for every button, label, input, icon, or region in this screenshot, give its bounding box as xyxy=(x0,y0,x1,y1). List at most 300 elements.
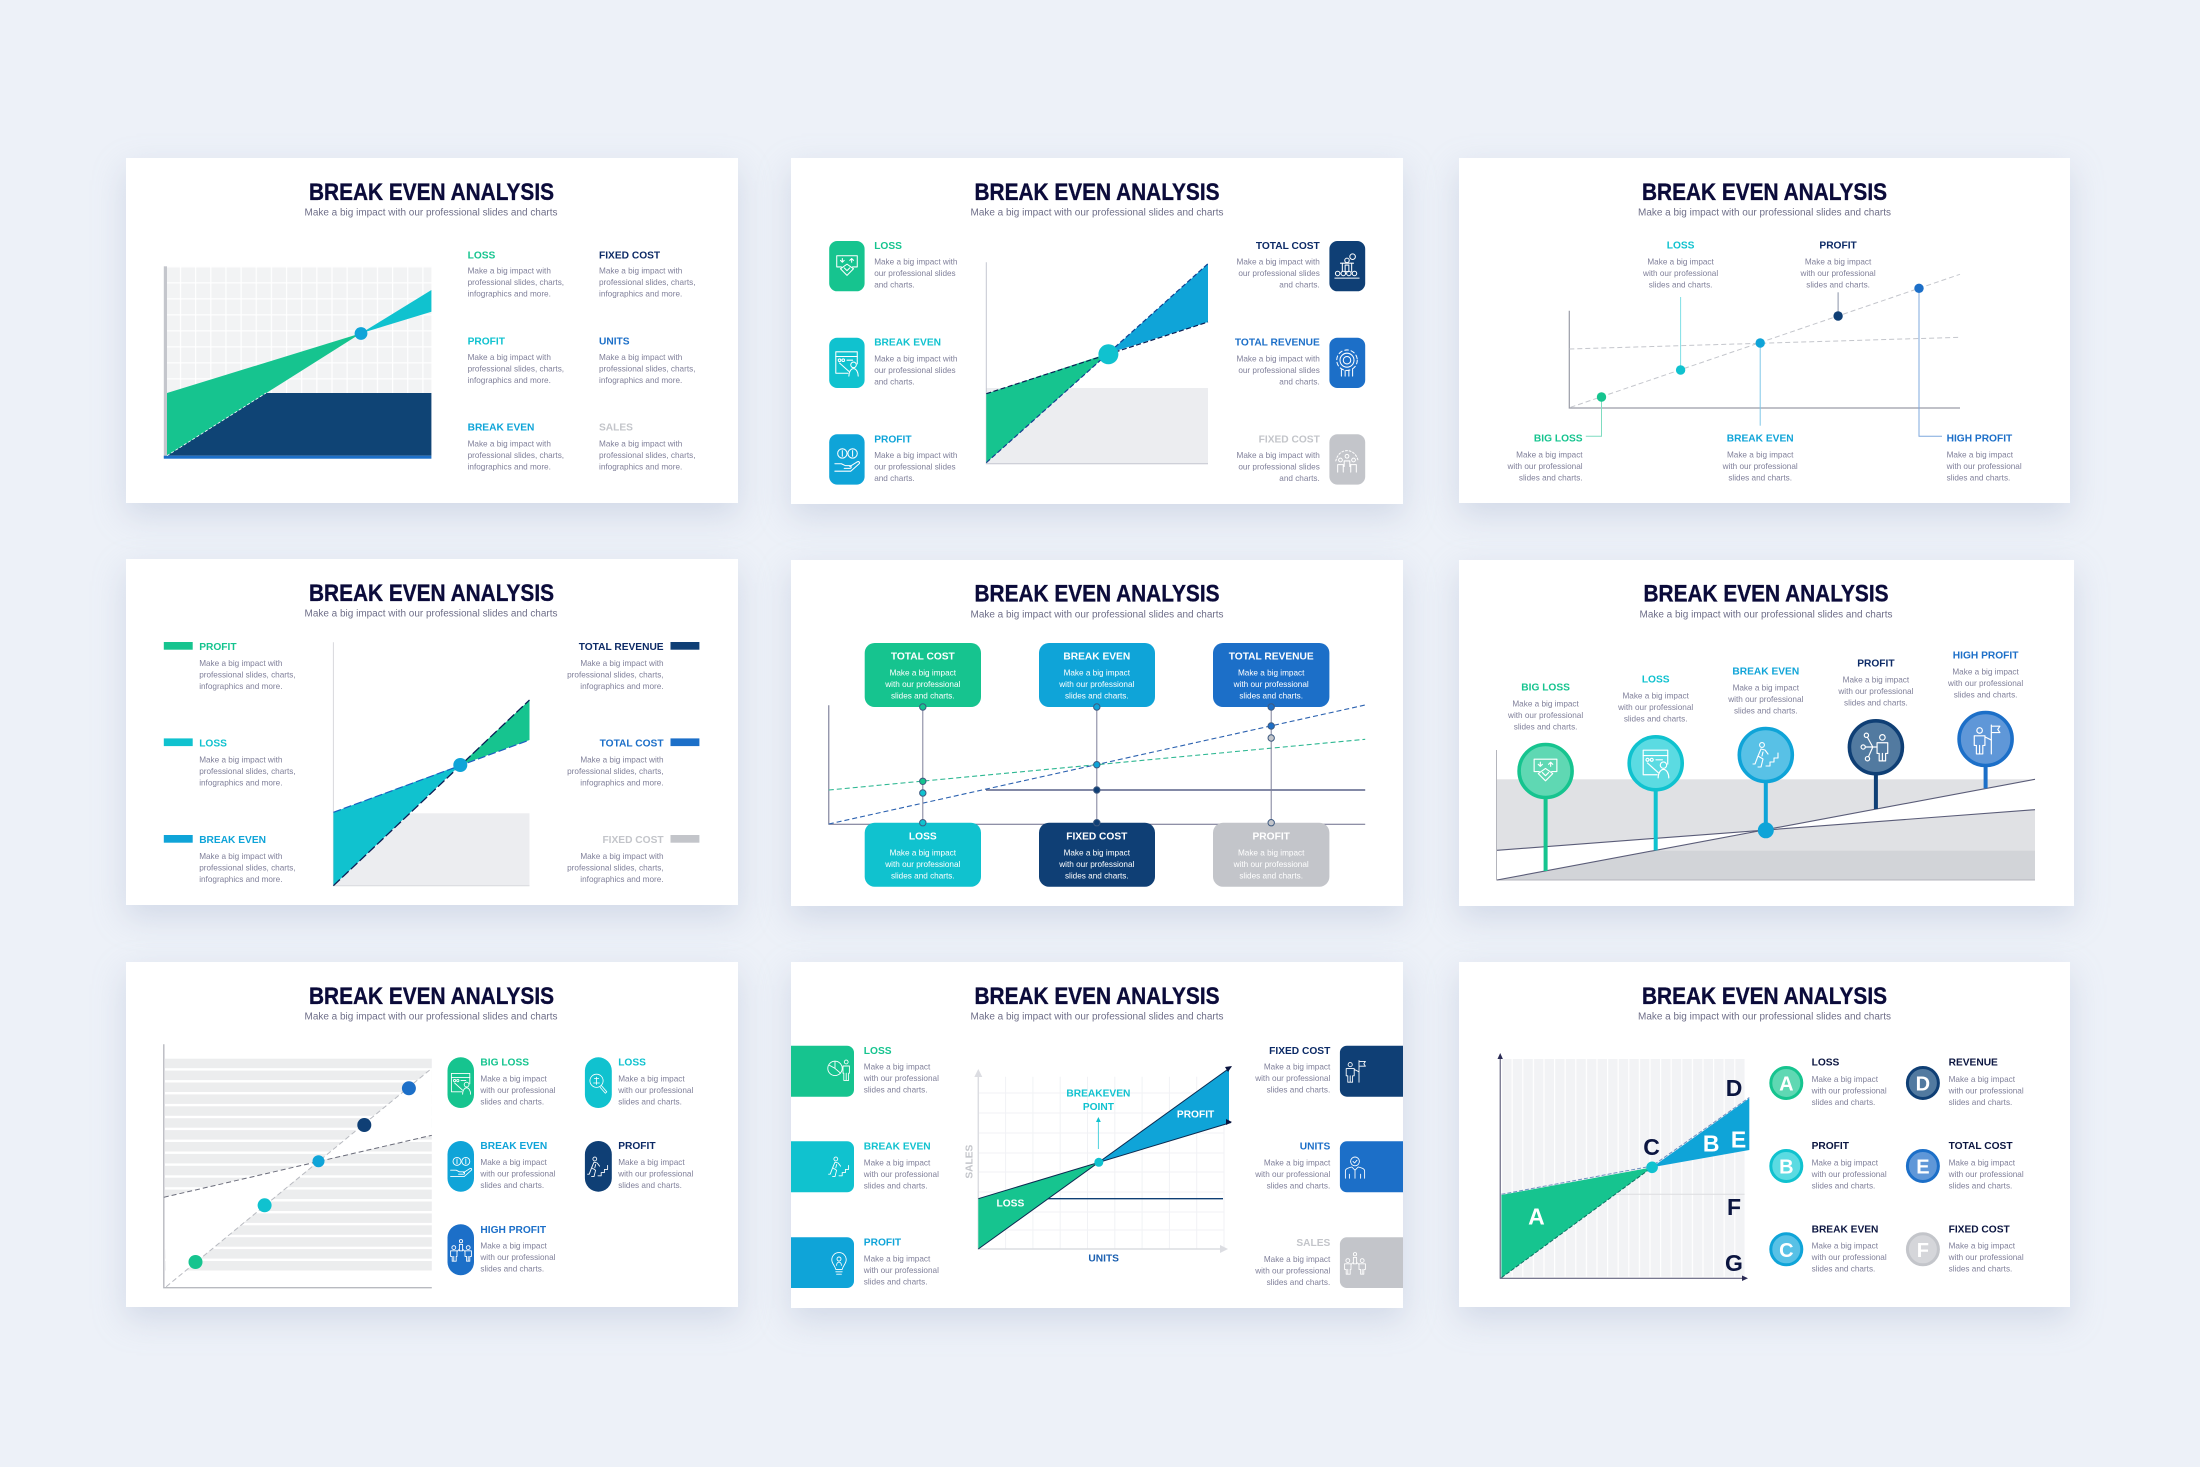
box: loss: slides and charts. xyxy=(891,872,955,881)
item: break even: with our professional xyxy=(479,1170,556,1178)
title: BREAK EVEN ANALYSIS xyxy=(974,983,1220,1010)
panel: bottom-centre slide with labelled chart xyxy=(791,962,1403,1308)
area chart xyxy=(333,642,530,886)
tab: units: slides and charts. xyxy=(1267,1182,1330,1191)
pin: profit: slides and charts. xyxy=(1844,699,1908,708)
key: A loss: Make a big impact xyxy=(1812,1075,1879,1084)
card: profit: our professional slides xyxy=(874,463,956,472)
box: profit: Make a big impact xyxy=(1238,849,1305,858)
pin: loss xyxy=(1617,674,1693,850)
legend: fixed cost: professional slides, charts, xyxy=(567,863,664,872)
box: fixed cost: with our professional xyxy=(1058,860,1135,869)
item: loss: LOSS xyxy=(618,1058,646,1069)
box: fixed cost: Make a big impact xyxy=(1064,849,1131,858)
key: C break even: BREAK EVEN xyxy=(1812,1224,1878,1235)
item: loss: slides and charts. xyxy=(618,1097,682,1106)
box: break even xyxy=(1039,643,1155,710)
text: sales: SALES xyxy=(599,423,633,434)
pin: profit xyxy=(1837,659,1914,809)
item: high profit: with our professional xyxy=(479,1253,556,1262)
card: total revenue xyxy=(1235,338,1365,388)
key: A loss: slides and charts. xyxy=(1812,1098,1875,1107)
item: profit: Make a big impact xyxy=(618,1158,685,1167)
key: D revenue: with our professional xyxy=(1948,1086,2024,1096)
text: break even: Make a big impact with xyxy=(468,439,551,448)
line chart xyxy=(1569,274,1960,436)
card: fixed cost: our professional slides xyxy=(1238,463,1320,472)
text: sales: infographics and more. xyxy=(599,462,682,471)
card: total revenue: our professional slides xyxy=(1238,366,1320,375)
key: F fixed cost: slides and charts. xyxy=(1949,1265,2012,1274)
title: BREAK EVEN ANALYSIS xyxy=(309,580,554,607)
text: units: UNITS xyxy=(599,336,630,347)
text: fixed cost: FIXED COST xyxy=(599,250,661,261)
lettered chart: B xyxy=(1703,1131,1720,1157)
text: break even: infographics and more. xyxy=(468,462,551,471)
panel: top-left slide with grid area chart xyxy=(126,158,738,503)
text: big loss: slides and charts. xyxy=(1519,473,1583,482)
title: BREAK EVEN ANALYSIS xyxy=(309,983,554,1010)
tab: break even: Make a big impact xyxy=(864,1159,931,1168)
item: loss: Make a big impact xyxy=(618,1074,685,1083)
legend: profit: Make a big impact with xyxy=(199,659,283,668)
subtitle: Make a big impact with our professional slides and charts xyxy=(304,1012,558,1023)
lettered chart: D xyxy=(1726,1075,1742,1101)
subtitle: Make a big impact with our professional slides and charts xyxy=(1638,1012,1891,1023)
title: BREAK EVEN ANALYSIS xyxy=(974,581,1220,608)
pin: big loss: Make a big impact xyxy=(1512,699,1580,708)
pin: big loss: BIG LOSS xyxy=(1521,682,1570,693)
box: total revenue: with our professional xyxy=(1233,680,1309,689)
key: A loss: LOSS xyxy=(1812,1058,1840,1069)
card: total revenue: TOTAL REVENUE xyxy=(1235,338,1320,349)
text: loss xyxy=(1642,241,1718,289)
pin: big loss: slides and charts. xyxy=(1514,722,1577,731)
box: total cost xyxy=(865,643,981,710)
tab: fixed cost: FIXED COST xyxy=(1269,1046,1331,1057)
labelled break-even chart xyxy=(964,1066,1232,1265)
box: fixed cost xyxy=(1039,820,1155,887)
legend: loss: professional slides, charts, xyxy=(199,767,296,776)
legend: fixed cost xyxy=(567,835,699,884)
text: break even: Make a big impact xyxy=(1727,450,1794,459)
card: profit: PROFIT xyxy=(874,434,912,445)
box: break even: BREAK EVEN xyxy=(1063,651,1130,662)
legend: total cost xyxy=(567,738,699,787)
title: BREAK EVEN ANALYSIS xyxy=(1644,581,1888,608)
text: loss: slides and charts. xyxy=(1649,280,1712,289)
legend: loss xyxy=(164,738,296,787)
pin: break even: BREAK EVEN xyxy=(1732,666,1799,677)
key: B profit: Make a big impact xyxy=(1812,1158,1879,1167)
pin: break even: slides and charts. xyxy=(1734,707,1798,716)
text: big loss: Make a big impact xyxy=(1516,450,1583,459)
legend: break even xyxy=(164,835,296,884)
text: big loss: BIG LOSS xyxy=(1534,434,1583,445)
key: D revenue: REVENUE xyxy=(1949,1058,1998,1069)
tab: sales: slides and charts. xyxy=(1267,1278,1330,1287)
legend: loss: infographics and more. xyxy=(199,778,282,787)
tab: loss: with our professional xyxy=(863,1074,939,1083)
item: big loss: slides and charts. xyxy=(480,1097,544,1106)
pin: big loss xyxy=(1507,682,1583,871)
tab: loss: LOSS xyxy=(864,1046,892,1057)
text: profit: Make a big impact with xyxy=(468,353,551,362)
legend: fixed cost: FIXED COST xyxy=(602,835,664,846)
card: break even: Make a big impact with xyxy=(874,354,958,363)
pin: profit: PROFIT xyxy=(1857,659,1895,670)
text: break even xyxy=(1722,434,1798,482)
text: loss: Make a big impact with xyxy=(468,267,551,276)
item: break even xyxy=(448,1141,556,1192)
box: loss: LOSS xyxy=(909,831,937,842)
item: profit: slides and charts. xyxy=(618,1181,682,1190)
tab: units xyxy=(1254,1141,1403,1192)
key: C break even: Make a big impact xyxy=(1812,1242,1879,1251)
text: loss: LOSS xyxy=(1667,241,1695,252)
labelled break-even chart: SALES xyxy=(964,1145,976,1179)
card: fixed cost: FIXED COST xyxy=(1259,434,1321,445)
pin: break even: with our professional xyxy=(1727,695,1804,704)
legend: total cost: infographics and more. xyxy=(580,778,664,787)
text: break even: BREAK EVEN xyxy=(468,423,534,434)
text: profit xyxy=(1800,241,1876,289)
key: D revenue: slides and charts. xyxy=(1949,1098,2012,1107)
tab: fixed cost: with our professional xyxy=(1254,1074,1330,1083)
tab: break even xyxy=(791,1141,939,1192)
tab: profit xyxy=(791,1237,939,1288)
box: profit: slides and charts. xyxy=(1239,872,1303,881)
card: loss: LOSS xyxy=(874,241,902,252)
legend: total cost: TOTAL COST xyxy=(600,738,664,749)
card: break even xyxy=(829,338,958,388)
box: total revenue: slides and charts. xyxy=(1239,692,1303,701)
item: big loss: Make a big impact xyxy=(480,1074,548,1083)
card: profit: and charts. xyxy=(874,474,915,483)
text: break even: slides and charts. xyxy=(1728,473,1792,482)
item: loss xyxy=(585,1057,693,1108)
box: profit: with our professional xyxy=(1233,860,1309,869)
text: profit: infographics and more. xyxy=(468,376,551,385)
box: fixed cost: slides and charts. xyxy=(1065,872,1129,881)
lettered chart: F xyxy=(1727,1194,1741,1220)
pin: high profit: HIGH PROFIT xyxy=(1953,651,2019,662)
pin: high profit: Make a big impact xyxy=(1952,668,2020,677)
card: fixed cost: Make a big impact with xyxy=(1237,451,1320,460)
text: fixed cost: infographics and more. xyxy=(599,290,682,299)
box: loss: Make a big impact xyxy=(890,849,957,858)
tab: profit: PROFIT xyxy=(864,1238,902,1249)
area chart xyxy=(164,266,431,459)
tab: loss: Make a big impact xyxy=(864,1063,931,1072)
tab: units: UNITS xyxy=(1300,1142,1331,1153)
card: loss: our professional slides xyxy=(874,269,956,278)
text: big loss xyxy=(1507,434,1583,482)
pin: high profit xyxy=(1947,651,2023,788)
pin: high profit: with our professional xyxy=(1947,679,2023,688)
card: loss: Make a big impact with xyxy=(874,258,958,267)
key: C break even: slides and charts. xyxy=(1812,1265,1875,1274)
item: high profit: HIGH PROFIT xyxy=(480,1225,547,1236)
panel: top-right slide with dotted line chart xyxy=(1459,158,2070,503)
legend: total revenue: Make a big impact with xyxy=(580,659,664,668)
legend: profit: infographics and more. xyxy=(199,682,282,691)
box: total cost: with our professional xyxy=(884,680,961,689)
key: C break even: with our professional xyxy=(1811,1253,1887,1262)
tab: sales: SALES xyxy=(1296,1238,1331,1249)
key: B profit: slides and charts. xyxy=(1812,1181,1875,1190)
text: loss: LOSS xyxy=(468,250,496,261)
legend: break even: Make a big impact with xyxy=(199,852,283,861)
tab: loss xyxy=(791,1046,939,1097)
key: F fixed cost: with our professional xyxy=(1948,1253,2024,1262)
key: F fixed cost: F xyxy=(1917,1240,1929,1262)
box: break even: Make a big impact xyxy=(1064,669,1131,678)
card: total cost: our professional slides xyxy=(1238,269,1320,278)
title: BREAK EVEN ANALYSIS xyxy=(1642,179,1887,206)
legend: total revenue: TOTAL REVENUE xyxy=(579,642,664,653)
text: profit: slides and charts. xyxy=(1806,280,1870,289)
text: sales: professional slides, charts, xyxy=(599,451,695,460)
callout: breakeven point: BREAKEVEN xyxy=(1066,1089,1130,1100)
card: break even: our professional slides xyxy=(874,366,956,375)
subtitle: Make a big impact with our professional slides and charts xyxy=(970,610,1224,621)
lettered chart: G xyxy=(1725,1250,1743,1276)
panel: middle-left slide with legend bars xyxy=(126,559,738,905)
key: E total cost: Make a big impact xyxy=(1949,1158,2016,1167)
box: total revenue: Make a big impact xyxy=(1238,669,1305,678)
legend: fixed cost: Make a big impact with xyxy=(580,852,664,861)
text: loss: professional slides, charts, xyxy=(468,278,564,287)
pin: high profit: slides and charts. xyxy=(1954,691,2017,700)
card: loss: and charts. xyxy=(874,281,915,290)
legend: total cost: professional slides, charts, xyxy=(567,767,664,776)
pin: loss: LOSS xyxy=(1642,674,1670,685)
card: total revenue: and charts. xyxy=(1279,377,1320,386)
key: C break even xyxy=(1771,1224,1887,1274)
title: BREAK EVEN ANALYSIS xyxy=(309,179,554,206)
panel: bottom-left slide with striped chart xyxy=(126,962,738,1307)
item: break even: Make a big impact xyxy=(480,1158,548,1167)
panel: top-centre slide with icon cards xyxy=(791,158,1403,504)
box: break even: slides and charts. xyxy=(1065,692,1129,701)
pin: big loss: with our professional xyxy=(1507,711,1583,720)
box: total revenue: TOTAL REVENUE xyxy=(1229,651,1314,662)
title: BREAK EVEN ANALYSIS xyxy=(1642,983,1887,1010)
box: fixed cost: FIXED COST xyxy=(1066,831,1128,842)
tab: sales: Make a big impact xyxy=(1264,1255,1331,1264)
box: profit xyxy=(1213,820,1329,887)
subtitle: Make a big impact with our professional slides and charts xyxy=(304,609,558,620)
text: high profit: with our professional xyxy=(1946,462,2022,471)
line chart xyxy=(829,705,1365,824)
text: sales: Make a big impact with xyxy=(599,439,683,448)
legend: loss: LOSS xyxy=(199,738,227,749)
text: high profit: HIGH PROFIT xyxy=(1947,434,2013,445)
key: A loss xyxy=(1771,1058,1887,1107)
box: total revenue xyxy=(1213,643,1329,710)
key: E total cost: with our professional xyxy=(1948,1170,2024,1179)
text: break even: professional slides, charts, xyxy=(468,451,564,460)
item: high profit xyxy=(448,1224,556,1275)
text: loss: Make a big impact xyxy=(1647,257,1715,266)
box: profit: PROFIT xyxy=(1253,831,1291,842)
card: profit xyxy=(829,434,958,485)
tab: sales xyxy=(1254,1237,1403,1288)
legend: profit: professional slides, charts, xyxy=(199,670,296,680)
tab: loss: slides and charts. xyxy=(864,1086,928,1095)
labelled break-even chart: LOSS xyxy=(997,1199,1024,1210)
key: A loss: with our professional xyxy=(1811,1086,1887,1096)
tab: profit: slides and charts. xyxy=(864,1277,928,1286)
text: fixed cost: Make a big impact with xyxy=(599,267,683,276)
text: profit: Make a big impact xyxy=(1805,257,1872,266)
pin: break even xyxy=(1727,666,1804,838)
key: E total cost: E xyxy=(1916,1156,1930,1178)
panel: bottom-right slide with lettered chart xyxy=(1459,962,2070,1307)
pin: loss: slides and charts. xyxy=(1624,715,1688,724)
key: B profit xyxy=(1771,1141,1887,1190)
legend: break even: professional slides, charts, xyxy=(199,863,296,872)
tab: break even: slides and charts. xyxy=(864,1182,928,1191)
text: high profit xyxy=(1946,434,2022,482)
text: break even: BREAK EVEN xyxy=(1727,434,1794,445)
legend: total revenue: infographics and more. xyxy=(580,682,664,691)
tab: break even: with our professional xyxy=(863,1170,939,1179)
item: break even: slides and charts. xyxy=(480,1181,544,1190)
tab: fixed cost: slides and charts. xyxy=(1267,1086,1330,1095)
box: loss: with our professional xyxy=(884,860,961,869)
legend: total revenue xyxy=(567,642,699,691)
card: fixed cost: and charts. xyxy=(1279,474,1320,483)
legend: total revenue: professional slides, charts, xyxy=(567,670,664,680)
item: break even: BREAK EVEN xyxy=(480,1141,547,1152)
legend: total cost: Make a big impact with xyxy=(580,755,664,764)
box: loss xyxy=(865,820,981,887)
card: total cost: TOTAL COST xyxy=(1256,241,1321,252)
item: loss: with our professional xyxy=(617,1086,693,1095)
pin: profit: Make a big impact xyxy=(1843,676,1910,685)
text: break even: with our professional xyxy=(1722,462,1798,471)
card: total cost: and charts. xyxy=(1279,281,1320,290)
pin: loss: Make a big impact xyxy=(1622,692,1690,701)
text: fixed cost: professional slides, charts, xyxy=(599,278,695,287)
legend: fixed cost: infographics and more. xyxy=(580,875,664,884)
card: fixed cost xyxy=(1237,434,1365,485)
text: units: infographics and more. xyxy=(599,376,682,385)
text: break even xyxy=(468,423,564,471)
area chart xyxy=(1496,750,2035,880)
item: big loss: BIG LOSS xyxy=(480,1058,529,1069)
legend: loss: Make a big impact with xyxy=(199,755,283,764)
key: F fixed cost: FIXED COST xyxy=(1949,1224,2011,1235)
tab: profit: with our professional xyxy=(863,1266,939,1275)
key: E total cost xyxy=(1907,1141,2024,1190)
key: F fixed cost xyxy=(1907,1224,2024,1274)
lettered chart: A xyxy=(1528,1203,1545,1229)
legend: break even: infographics and more. xyxy=(199,875,282,884)
text: big loss: with our professional xyxy=(1507,462,1583,471)
key: E total cost: slides and charts. xyxy=(1949,1181,2012,1190)
text: units: Make a big impact with xyxy=(599,353,683,362)
card: total cost xyxy=(1237,241,1365,291)
card: break even: and charts. xyxy=(874,377,915,386)
tab: fixed cost: Make a big impact xyxy=(1264,1063,1331,1072)
key: D revenue: D xyxy=(1916,1074,1930,1096)
text: sales xyxy=(599,423,695,471)
lettered chart xyxy=(1498,1053,1749,1281)
text: units: professional slides, charts, xyxy=(599,364,695,374)
text: fixed cost xyxy=(599,250,695,299)
key: D revenue: Make a big impact xyxy=(1949,1075,2016,1084)
key: A loss: A xyxy=(1779,1074,1794,1096)
striped chart xyxy=(164,1044,432,1288)
card: loss xyxy=(829,241,958,291)
key: F fixed cost: Make a big impact xyxy=(1949,1242,2016,1251)
key: C break even: C xyxy=(1779,1240,1794,1262)
legend: break even: BREAK EVEN xyxy=(199,835,266,846)
box: break even: with our professional xyxy=(1058,680,1135,689)
text: loss: infographics and more. xyxy=(468,290,551,299)
legend: profit xyxy=(164,642,296,691)
text: profit: professional slides, charts, xyxy=(468,364,564,374)
subtitle: Make a big impact with our professional slides and charts xyxy=(304,208,558,219)
lettered chart: C xyxy=(1643,1134,1660,1160)
item: profit xyxy=(585,1141,693,1192)
labelled break-even chart: UNITS xyxy=(1088,1254,1119,1265)
box: total cost: TOTAL COST xyxy=(891,651,956,662)
subtitle: Make a big impact with our professional slides and charts xyxy=(1640,610,1893,621)
item: profit: PROFIT xyxy=(618,1141,656,1152)
legend: profit: PROFIT xyxy=(199,642,237,653)
text: high profit: Make a big impact xyxy=(1947,450,2014,459)
tab: profit: Make a big impact xyxy=(864,1254,931,1263)
text: profit xyxy=(468,336,564,385)
card: total cost: Make a big impact with xyxy=(1237,258,1320,267)
pin: break even: Make a big impact xyxy=(1733,684,1800,693)
item: high profit: slides and charts. xyxy=(480,1265,544,1274)
box: total cost: slides and charts. xyxy=(891,692,955,701)
panel: middle-right slide with circular pins xyxy=(1459,560,2074,906)
key: D revenue xyxy=(1907,1058,2024,1107)
labelled break-even chart: PROFIT xyxy=(1177,1109,1215,1120)
item: big loss xyxy=(448,1057,556,1108)
tab: fixed cost xyxy=(1254,1046,1403,1097)
pin: loss: with our professional xyxy=(1617,703,1693,712)
text: loss: with our professional xyxy=(1642,269,1718,278)
item: high profit: Make a big impact xyxy=(480,1242,548,1251)
item: profit: with our professional xyxy=(617,1170,693,1178)
callout: breakeven point: POINT xyxy=(1083,1102,1115,1113)
key: E total cost: TOTAL COST xyxy=(1949,1141,2013,1152)
subtitle: Make a big impact with our professional slides and charts xyxy=(1638,208,1891,219)
key: B profit: PROFIT xyxy=(1812,1141,1850,1152)
text: high profit: slides and charts. xyxy=(1947,473,2010,482)
item: big loss: with our professional xyxy=(479,1086,556,1095)
text: loss xyxy=(468,250,564,299)
area chart xyxy=(986,262,1208,464)
key: B profit: B xyxy=(1779,1156,1794,1178)
pin: profit: with our professional xyxy=(1837,687,1914,696)
panel: middle-centre slide with connected boxes xyxy=(791,560,1403,906)
title: BREAK EVEN ANALYSIS xyxy=(974,179,1220,206)
card: profit: Make a big impact with xyxy=(874,451,958,460)
text: units xyxy=(599,336,695,385)
key: B profit: with our professional xyxy=(1811,1170,1887,1179)
tab: break even: BREAK EVEN xyxy=(864,1142,931,1153)
tab: units: with our professional xyxy=(1254,1170,1330,1179)
lettered chart: E xyxy=(1731,1127,1746,1153)
